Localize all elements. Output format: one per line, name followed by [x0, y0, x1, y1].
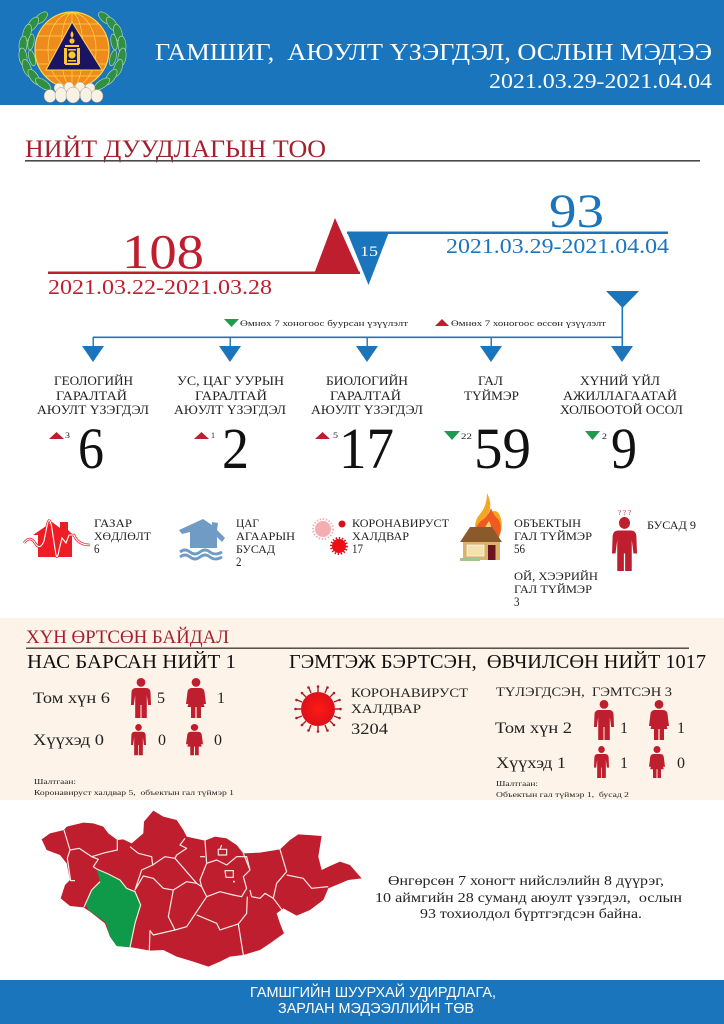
panel: human impact — [0, 618, 724, 800]
icon: burning house — [460, 493, 502, 561]
icon: large coronavirus — [294, 685, 342, 733]
label: fire: ОЙ, ХЭЭРИЙН — [514, 569, 598, 583]
map base — [42, 811, 362, 967]
deaths note: Шалтгаан: — [34, 777, 76, 786]
comparison: previous week — [48, 218, 360, 299]
column: fire: 59 — [474, 416, 531, 481]
label: other: БУСАД 9 — [647, 520, 696, 532]
label: weather: 2 — [236, 555, 242, 569]
deaths note: Коронавируст халдвар 5, объектын гал түймэр 1 — [34, 788, 234, 797]
injured: adults: 1 — [620, 720, 628, 737]
triangle with soyombo — [46, 22, 102, 70]
column: fire: 22 — [461, 431, 472, 441]
icon: flood house — [179, 519, 225, 559]
column: biological: БИОЛОГИЙН — [326, 374, 408, 388]
label: earthquake: 6 — [94, 542, 100, 556]
column: weather: 1 — [211, 430, 215, 440]
comparison: previous week: 2021.03.22-2021.03.28 — [48, 275, 272, 299]
legend — [224, 319, 607, 328]
column: weather: АЮУЛТ ҮЗЭГДЭЛ — [174, 403, 287, 417]
comparison: current week: 15 — [360, 244, 378, 260]
column: biological: 5 — [333, 430, 338, 440]
column: human activity: 9 — [611, 416, 637, 481]
injured: children — [496, 746, 685, 778]
logo — [18, 10, 127, 103]
label: coronavirus: КОРОНАВИРУСТ — [352, 518, 449, 530]
column: weather: 2 — [222, 416, 249, 481]
deaths: children: Хүүхэд 0 — [33, 732, 104, 749]
injured: adults: Том хүн 2 — [495, 720, 572, 737]
distribution arrows — [82, 291, 639, 362]
comparison: current week — [347, 185, 669, 285]
column: geological: ГЕОЛОГИЙН — [54, 374, 133, 388]
label: coronavirus: ХАЛДВАР — [352, 531, 409, 543]
coronavirus count: КОРОНАВИРУСТ — [351, 685, 468, 700]
injured: children: 0 — [677, 755, 685, 772]
injured: children: 1 — [620, 755, 628, 772]
injured note: Объектын гал түймэр 1, бусад 2 — [496, 790, 629, 799]
column: weather: ГАРАЛТАЙ — [195, 389, 267, 403]
label: weather — [236, 518, 295, 569]
laurel left — [18, 10, 53, 92]
column: biological: 17 — [339, 416, 394, 481]
column: human activity: ХОЛБООТОЙ ОСОЛ — [560, 403, 684, 417]
deaths: adults — [33, 678, 225, 718]
column: fire: ТҮЙМЭР — [464, 389, 519, 403]
injured: adults: 1 — [677, 720, 685, 737]
label: weather: БУСАД — [236, 544, 275, 556]
column: geological: 6 — [78, 416, 104, 481]
comparison: current week: 2021.03.29-2021.04.04 — [446, 234, 669, 258]
label: earthquake: ГАЗАР — [94, 518, 132, 530]
map summary text — [375, 874, 683, 922]
column: human activity: 2 — [602, 431, 607, 441]
column: geological: 3 — [65, 430, 70, 440]
label: fire: 56 — [514, 542, 525, 556]
legend: Өмнөх 7 хоногоос өссөн үзүүлэлт — [451, 319, 607, 328]
map summary text: 93 тохиолдол бүртгэгдсэн байна. — [420, 907, 642, 922]
injured: adults — [495, 700, 685, 740]
label: coronavirus — [352, 518, 449, 556]
column: geological: ГАРАЛТАЙ — [56, 389, 127, 403]
label: fire — [514, 518, 598, 609]
comparison: previous week: 108 — [122, 224, 204, 279]
label: fire: ГАЛ ТҮЙМЭР — [514, 529, 592, 543]
date range: 2021.03.29-2021.04.04 — [489, 69, 712, 93]
header band — [0, 0, 724, 105]
deaths: children — [33, 724, 222, 755]
column: geological: АЮУЛТ ҮЗЭГДЭЛ — [37, 403, 150, 417]
column: human activity: АЖИЛЛАГААТАЙ — [563, 389, 677, 403]
map summary text: 10 аймгийн 28 суманд аюулт үзэгдэл, ослын — [375, 891, 683, 906]
icon: coronavirus trio — [313, 519, 347, 554]
column: fire: ГАЛ — [478, 374, 504, 388]
footer band — [0, 980, 724, 1024]
label: earthquake: ХӨДЛӨЛТ — [94, 531, 151, 543]
map summary text: Өнгөрсөн 7 хоногт нийслэлийн 8 дүүрэг, — [388, 874, 664, 889]
deaths: adults: Том хүн 6 — [33, 690, 110, 707]
laurel right — [92, 10, 127, 92]
coronavirus count — [351, 685, 468, 738]
coronavirus count: ХАЛДВАР — [351, 701, 421, 716]
injured note — [496, 779, 629, 799]
coronavirus count: 3204 — [351, 721, 388, 738]
footer band: ЗАРЛАН МЭДЭЭЛЛИЙН ТӨВ — [278, 999, 474, 1017]
section heading: total calls: НИЙТ ДУУДЛАГЫН ТОО — [25, 135, 326, 163]
column: geological — [37, 374, 150, 481]
deaths: children: 0 — [158, 732, 166, 749]
deaths: adults: 5 — [157, 690, 165, 707]
injured: children: Хүүхэд 1 — [496, 755, 566, 772]
label: weather: ЦАГ — [236, 518, 259, 530]
label: coronavirus: 17 — [352, 542, 363, 556]
deaths: adults: 1 — [217, 690, 225, 707]
injured heading: ГЭМТЭЖ БЭРТСЭН, ӨВЧИЛСӨН НИЙТ 1017 — [289, 650, 706, 673]
icon: earthquake house — [24, 520, 90, 557]
icon: person with question marks — [612, 509, 637, 571]
globe — [35, 12, 109, 88]
column: human activity — [560, 374, 684, 481]
deaths: children: 0 — [214, 732, 222, 749]
deaths note — [34, 777, 234, 797]
deaths heading: НАС БАРСАН НИЙТ 1 — [27, 650, 236, 673]
footer band: ГАМШГИЙН ШУУРХАЙ УДИРДЛАГА, — [250, 983, 496, 1001]
label: fire: 3 — [514, 595, 520, 609]
column: weather — [174, 374, 287, 481]
label: weather: АГААРЫН — [236, 531, 295, 543]
comparison: current week: 93 — [549, 185, 604, 238]
lotus flowers — [44, 82, 103, 103]
label: fire: ГАЛ ТҮЙМЭР — [514, 582, 592, 596]
icon: person with question marks: ? ? ? — [618, 509, 631, 517]
injured subheading: ТҮЛЭГДСЭН, ГЭМТСЭН 3 — [496, 684, 672, 699]
column: fire — [444, 374, 531, 481]
column: biological: АЮУЛТ ҮЗЭГДЭЛ — [311, 403, 424, 417]
injured note: Шалтгаан: — [496, 779, 538, 788]
column: biological: ГАРАЛТАЙ — [330, 389, 401, 403]
map of Mongolia — [42, 811, 362, 967]
column: human activity: ХҮНИЙ ҮЙЛ — [580, 374, 661, 388]
column: weather: УС, ЦАГ УУРЫН — [177, 374, 284, 388]
title: ГАМШИГ, АЮУЛТ ҮЗЭГДЭЛ, ОСЛЫН МЭДЭЭ — [155, 40, 712, 66]
label: fire: ОБЪЕКТЫН — [514, 518, 581, 530]
label: earthquake — [94, 518, 151, 556]
legend: Өмнөх 7 хоногоос буурсан үзүүлэлт — [240, 319, 409, 328]
highlighted province — [86, 869, 141, 947]
panel heading: ХҮН ӨРТСӨН БАЙДАЛ — [26, 627, 229, 648]
column: biological — [311, 374, 424, 481]
